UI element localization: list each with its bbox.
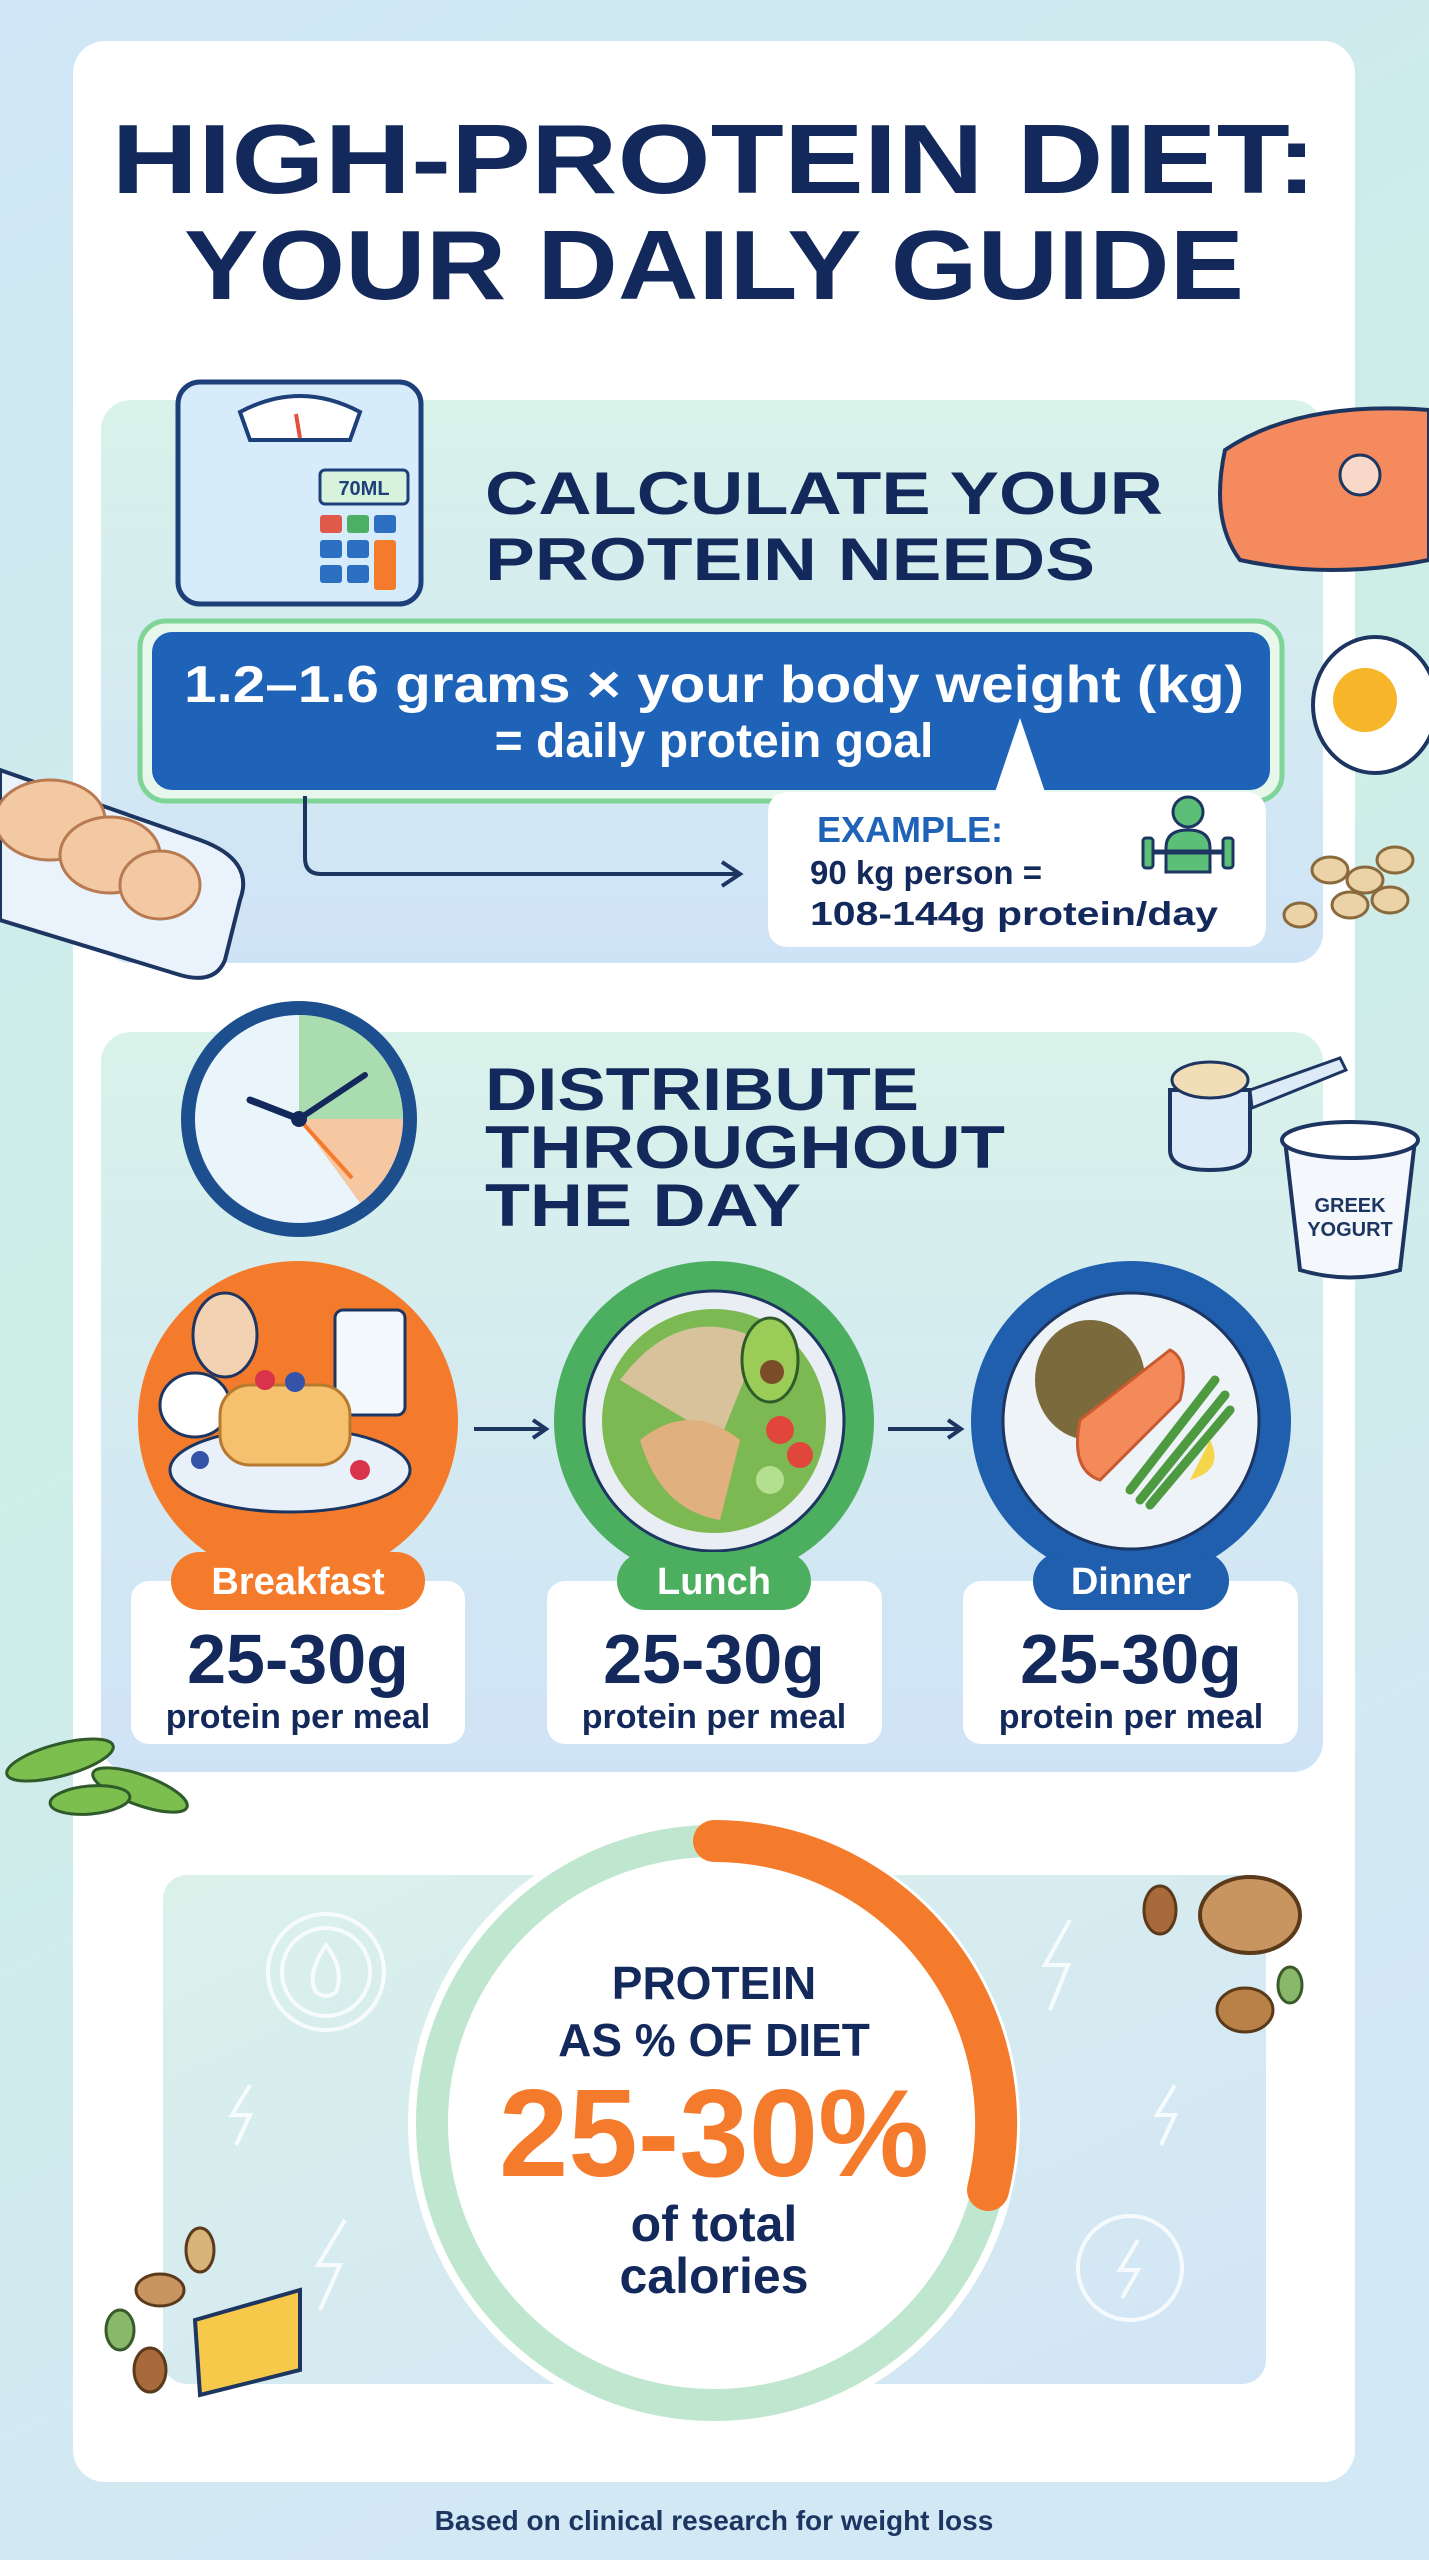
chart: protein ring: calories [619, 2248, 809, 2304]
heading: distribute throughout the day: THE DAY [485, 1172, 801, 1239]
icon: protein scoop [1170, 1058, 1346, 1170]
card: lunch amount: 25-30g [603, 1620, 825, 1698]
chart: protein ring: of total [631, 2196, 797, 2252]
icon: flame badge [268, 1914, 384, 2030]
card: dinner amount [963, 1552, 1298, 1744]
arrow [474, 1420, 546, 1438]
title [112, 104, 1316, 320]
icon: nuts [1144, 1877, 1302, 2032]
icon: greek yogurt [1282, 1122, 1418, 1278]
icon: boiled egg [1313, 637, 1429, 773]
card: breakfast amount: protein per meal [166, 1698, 430, 1736]
icon: chicken board [0, 770, 243, 978]
footer: Based on clinical research for weight loss [435, 2505, 993, 2536]
title: HIGH-PROTEIN DIET: [112, 104, 1316, 214]
heading: calculate your protein needs [485, 460, 1163, 593]
callout: example: EXAMPLE: [817, 809, 1003, 850]
formula box: = daily protein goal [495, 715, 933, 768]
card: lunch amount [547, 1552, 882, 1744]
panel: calculate protein needs [101, 382, 1323, 963]
icon: cheese and nuts [106, 2228, 300, 2395]
icon: beans [1284, 847, 1413, 927]
card: dinner amount: 25-30g [1020, 1620, 1242, 1698]
card: breakfast amount [131, 1552, 465, 1744]
panel: protein as % of diet [163, 1817, 1266, 2429]
card: lunch amount: Lunch [657, 1561, 771, 1603]
heading: distribute throughout the day [485, 1056, 1005, 1239]
chart: protein ring: 25-30% [499, 2065, 929, 2203]
card: dinner amount: Dinner [1071, 1561, 1191, 1603]
card: breakfast amount: Breakfast [211, 1561, 385, 1603]
icon: scale calculator: 70ML [338, 478, 390, 500]
meal: breakfast [138, 1261, 458, 1581]
icon: greek yogurt: YOGURT [1307, 1219, 1393, 1241]
card: dinner amount: protein per meal [999, 1698, 1263, 1736]
panel: distribute throughout the day [101, 1001, 1323, 1772]
icon: clock [181, 1001, 417, 1237]
icon: bolts [232, 1920, 1182, 2320]
icon: weightlifter [1143, 797, 1233, 872]
card: lunch amount: protein per meal [582, 1698, 846, 1736]
title: YOUR DAILY GUIDE [184, 210, 1244, 320]
formula box: 1.2–1.6 grams × your body weight (kg) [184, 656, 1244, 714]
icon: edamame [3, 1730, 192, 1821]
heading: distribute throughout the day: THROUGHOUT [485, 1114, 1005, 1181]
heading: calculate your protein needs: PROTEIN NEEDS [485, 526, 1095, 593]
callout: example: 90 kg person = [810, 854, 1042, 891]
card: breakfast amount: 25-30g [187, 1620, 409, 1698]
formula box [140, 621, 1282, 801]
icon: scale calculator [178, 382, 421, 604]
heading: calculate your protein needs: CALCULATE YOUR [485, 460, 1163, 527]
chart: protein ring: AS % OF DIET [558, 2014, 870, 2066]
meal: lunch [554, 1261, 874, 1581]
arrow: connector to example [305, 796, 740, 886]
arrow [888, 1420, 961, 1438]
callout: example [768, 718, 1266, 947]
icon: greek yogurt: GREEK [1314, 1195, 1386, 1217]
heading: distribute throughout the day: DISTRIBUTE [485, 1056, 919, 1123]
icon: salmon steak [1220, 408, 1429, 570]
chart: protein ring [408, 1817, 1020, 2429]
chart: protein ring: PROTEIN [612, 1957, 816, 2009]
callout: example: 108-144g protein/day [810, 895, 1219, 932]
meal: dinner [971, 1261, 1291, 1581]
